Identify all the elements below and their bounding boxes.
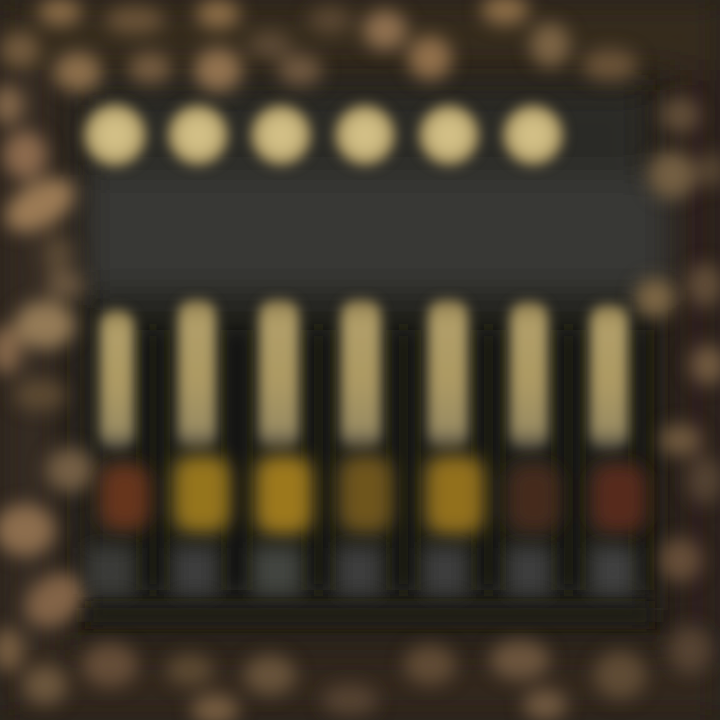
dark shelf line: [85, 607, 655, 623]
bottle shadows: [142, 330, 648, 590]
bottle grey bases: [87, 548, 634, 594]
row of seven bottles: [87, 300, 648, 594]
bottle coloured contents: [100, 456, 646, 534]
row of six cream circles: [83, 103, 564, 167]
bottle necks and bodies: [100, 300, 628, 450]
central dark panel: [85, 90, 670, 610]
